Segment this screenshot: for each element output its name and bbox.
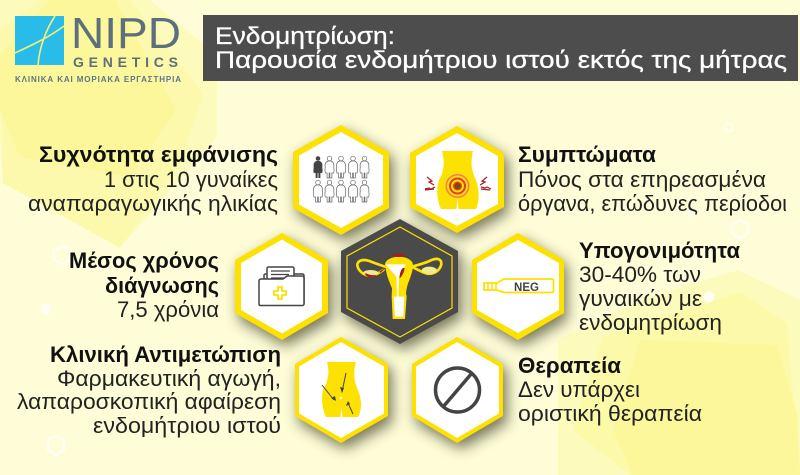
icon: uterus: [357, 254, 441, 319]
heading: Μέσος χρόνος: [69, 248, 219, 273]
text: Πόνος στα επηρεασμένα: [518, 167, 766, 192]
panel: infertility: [472, 233, 740, 340]
logo: NIPD Genetics: [15, 9, 181, 84]
panel: infertility: ενδομητρίωση: [579, 310, 722, 335]
heading: Θεραπεία: [518, 353, 621, 378]
text: Δεν υπάρχει: [518, 377, 640, 402]
icon: prohibition sign: [412, 337, 503, 443]
title banner: [203, 15, 798, 81]
panel: infertility: γυναικών με: [579, 286, 702, 311]
panel: center uterus: [341, 219, 458, 344]
panel: clinical management: [17, 337, 388, 443]
icon: laparoscopy: [295, 337, 388, 443]
panel: frequency: [28, 125, 389, 235]
icon: negative test: [472, 233, 564, 340]
heading: Κλινική Αντιμετώπιση: [50, 342, 281, 367]
hexagon shadows: [239, 131, 567, 449]
panel: clinical management: λαπαροσκοπική αφαίρεση: [17, 389, 281, 414]
panel: treatment: οριστική θεραπεία: [518, 401, 702, 426]
text: 1 στις 10 γυναίκες: [104, 167, 278, 192]
heading: Υπογονιμότητα: [579, 238, 740, 263]
label: NEG: NEG: [514, 282, 539, 294]
logo tagline: ΚΛΙΝΙΚΑ ΚΑΙ ΜΟΡΙΑΚΑ ΕΡΓΑΣΤΗΡΙΑ: [15, 75, 181, 84]
panel: clinical management: ενδομήτριου ιστού: [93, 413, 281, 438]
panel: treatment: [412, 337, 702, 443]
heading: Συχνότητα εμφάνισης: [39, 142, 278, 167]
icon: medical folder: [235, 233, 328, 340]
text: Φαρμακευτική αγωγή,: [57, 366, 281, 391]
title: Ενδομητρίωση:: [215, 23, 395, 50]
panel: frequency: αναπαραγωγικής ηλικίας: [28, 191, 278, 216]
subtitle: Παρουσία ενδομήτριου ιστού εκτός της μήτρας: [215, 47, 787, 74]
icon: abdominal pain: [410, 126, 504, 233]
icon: ten women: [293, 125, 389, 235]
panel: time to diagnosis: [69, 233, 328, 340]
panel: time to diagnosis: διάγνωσης: [105, 273, 219, 298]
panel: symptoms: [410, 126, 787, 233]
text: 7,5 χρόνια: [117, 297, 219, 322]
logo wordmark: NIPD: [71, 9, 181, 58]
logo mark: [15, 16, 64, 66]
text: 30-40% των: [579, 262, 701, 287]
heading: Συμπτώματα: [518, 142, 656, 167]
logo subtitle: GENETICS: [73, 54, 178, 70]
panel: symptoms: όργανα, επώδυνες περίοδοι: [518, 191, 787, 216]
